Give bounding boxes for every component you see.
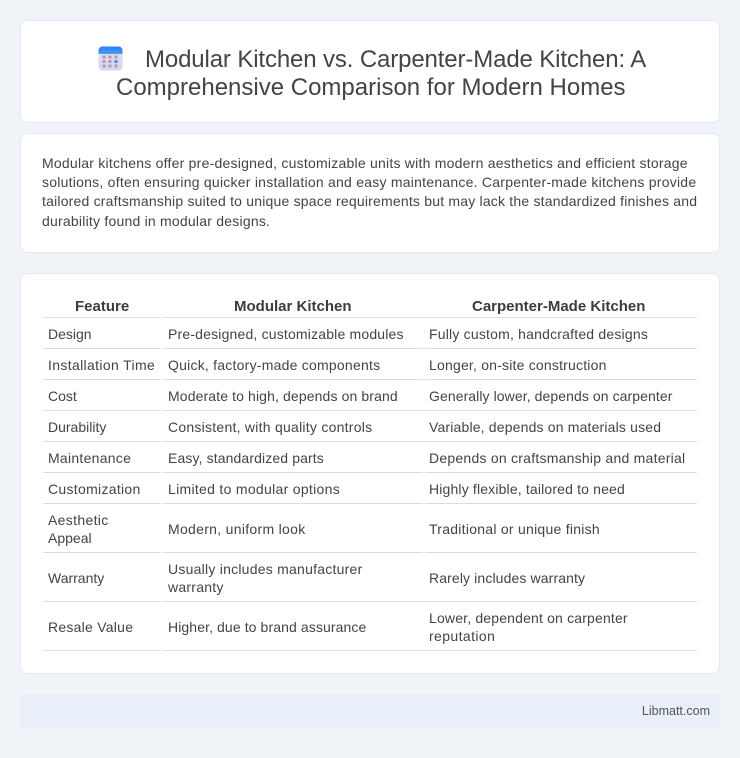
row: resale value: Resale Value — [48, 619, 133, 635]
row: warranty — [48, 561, 585, 595]
row: design: Design — [48, 326, 92, 342]
table header: Carpenter-Made Kitchen — [472, 298, 645, 315]
intro text panel — [20, 133, 720, 253]
row: warranty: Rarely includes warranty — [429, 570, 585, 586]
row: resale value — [48, 610, 628, 644]
row: customization: Customization — [48, 481, 141, 497]
footer — [20, 694, 720, 728]
row: resale value: Higher, due to brand assurance — [168, 619, 366, 635]
table header — [75, 298, 645, 315]
row: resale value: reputation — [429, 628, 495, 644]
row: durability: Variable, depends on materials used — [429, 419, 661, 435]
row: customization — [48, 481, 625, 497]
table header: Feature — [75, 298, 129, 315]
row: maintenance: Maintenance — [48, 450, 131, 466]
row: design: Fully custom, handcrafted designs — [429, 326, 648, 342]
intro paragraph: Modular kitchens offer pre-designed, customizable units with modern aesthetics and efficient storage — [42, 155, 688, 171]
intro paragraph: durability found in modular designs. — [42, 213, 270, 229]
row: maintenance: Depends on craftsmanship and material — [429, 450, 685, 466]
row: warranty: warranty — [168, 579, 224, 595]
intro paragraph: solutions, often ensuring quicker installation and easy maintenance. Carpenter-made kitchens provide — [42, 174, 696, 190]
row: cost: Generally lower, depends on carpenter — [429, 388, 672, 404]
intro paragraph — [42, 155, 697, 229]
comparison table — [43, 298, 697, 651]
row: durability: Durability — [48, 419, 106, 435]
icon: calendar — [98, 46, 122, 70]
title: Comprehensive Comparison for Modern Homes — [116, 74, 626, 101]
comparison table panel — [20, 273, 720, 674]
row: durability: Consistent, with quality controls — [168, 419, 372, 435]
row: customization: Highly flexible, tailored to need — [429, 481, 625, 497]
row: installation time: Installation Time — [48, 357, 155, 373]
row: cost: Moderate to high, depends on brand — [168, 388, 398, 404]
row: maintenance: Easy, standardized parts — [168, 450, 324, 466]
table header: Modular Kitchen — [234, 298, 352, 315]
row: design: Pre-designed, customizable modules — [168, 326, 404, 342]
footer credit: Libmatt.com — [642, 704, 710, 718]
row: durability — [48, 419, 661, 435]
row: cost — [48, 388, 672, 404]
row: resale value: Lower, dependent on carpenter — [429, 610, 628, 626]
row: aesthetic appeal: Traditional or unique finish — [429, 521, 600, 537]
row: aesthetic appeal: Aesthetic — [48, 512, 109, 528]
title: Modular Kitchen vs. Carpenter-Made Kitchen: A — [145, 46, 646, 73]
title — [116, 46, 646, 101]
row: maintenance — [48, 450, 685, 466]
row: cost: Cost — [48, 388, 77, 404]
row: installation time: Quick, factory-made components — [168, 357, 380, 373]
row: installation time: Longer, on-site construction — [429, 357, 607, 373]
row: warranty: Warranty — [48, 570, 104, 586]
title card — [20, 20, 720, 123]
row: design — [48, 326, 648, 342]
intro paragraph: tailored craftsmanship suited to unique space requirements but may lack the standardized finishes and — [42, 193, 697, 209]
row: installation time — [48, 357, 607, 373]
row: aesthetic appeal: Modern, uniform look — [168, 521, 306, 537]
row: aesthetic appeal — [48, 512, 600, 546]
row: customization: Limited to modular options — [168, 481, 340, 497]
row: aesthetic appeal: Appeal — [48, 530, 92, 546]
row: warranty: Usually includes manufacturer — [168, 561, 362, 577]
